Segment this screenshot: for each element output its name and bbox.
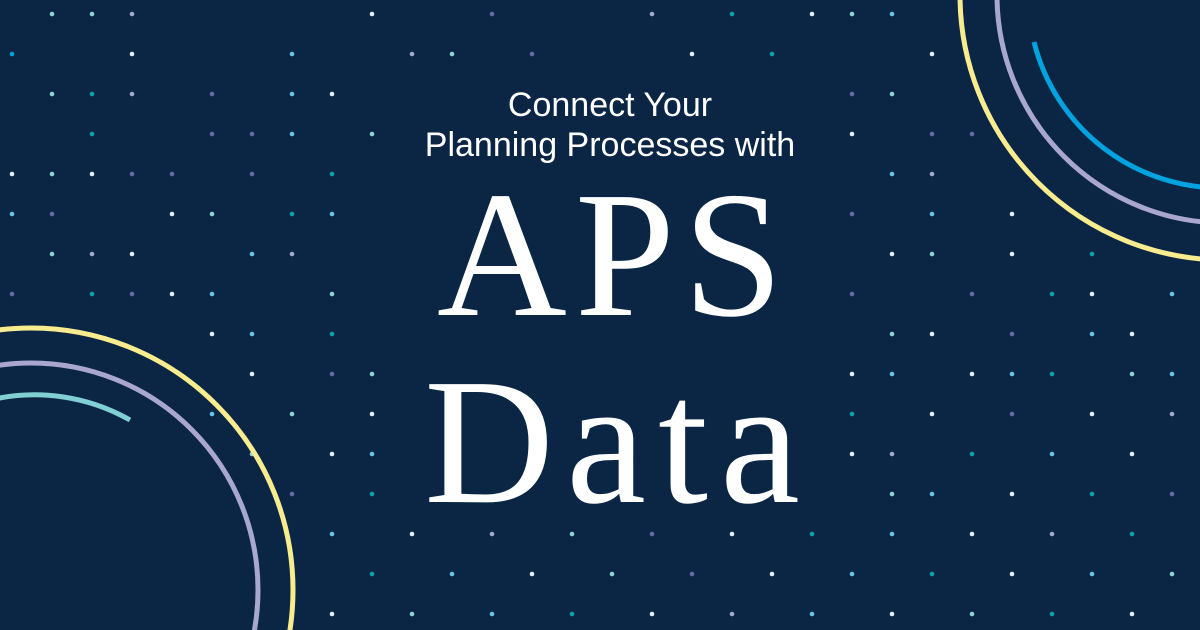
title: Data: Data — [424, 342, 812, 541]
subtitle — [425, 86, 795, 164]
title: APS: APS — [437, 155, 791, 354]
arcs: top right — [960, 0, 1200, 260]
subtitle: Connect Your — [508, 86, 712, 124]
subtitle: Planning Processes with — [425, 126, 795, 164]
arcs: bottom left — [0, 328, 293, 630]
